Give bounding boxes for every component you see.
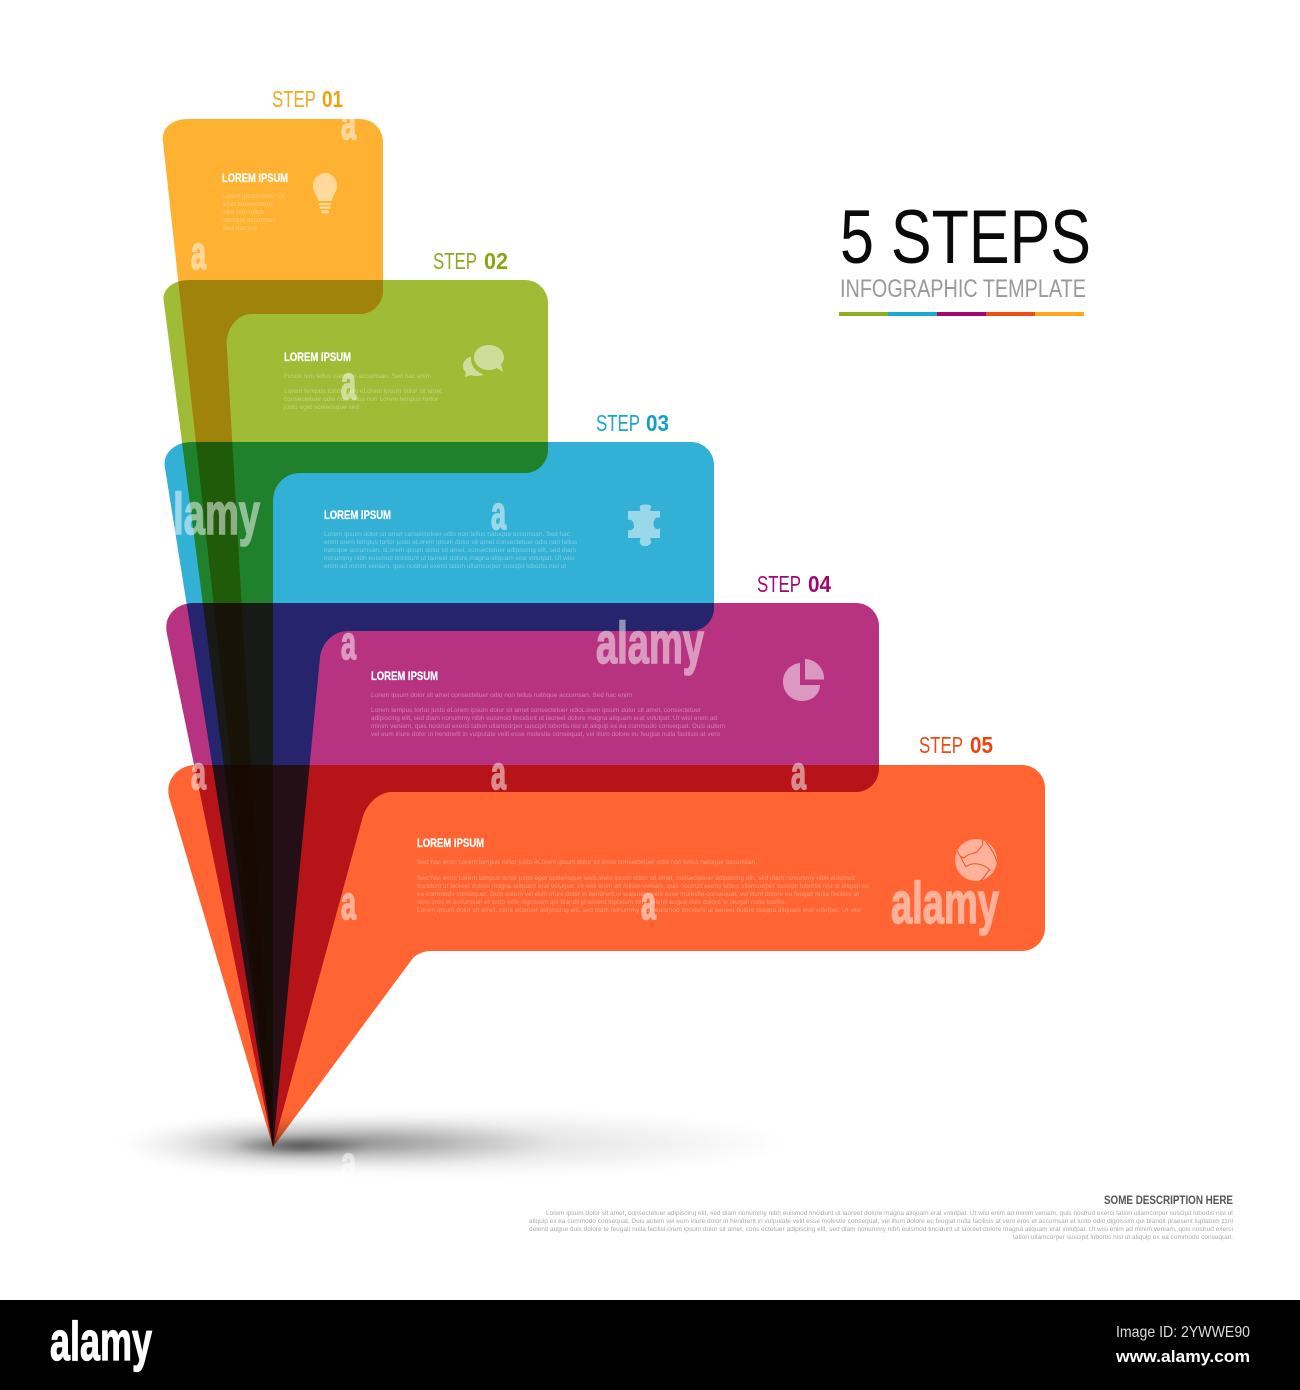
step 02 text: justo eget scelerisque sed [283,404,359,411]
stock watermarks: a [341,616,356,669]
stock watermarks: a [341,876,356,929]
step 05 text: ea commodo consequat. Duis autem vel eum iriure dolor in hendrerit in vulputate velit esse molestie consequat, vel illum dolore eu feugiat nulla facilisis at [417,891,859,898]
stock watermarks: a [791,746,806,799]
step 05 text: vero eros et accumsan et iusto odio dignissim qui blandit praesent luptatum zzril delenit augue duis dolore te feugait nulla facilisi. [417,899,786,906]
title [840,195,1091,303]
step 01 text: amet consectetuer [222,201,275,208]
stock watermarks: a [491,486,506,539]
step 05 label: 05 [970,732,993,758]
ground shadow [110,1109,790,1177]
step 01 text: LOREM IPSUM [222,171,288,185]
footer bar: Image ID: 2YWWE90 [1116,1324,1250,1341]
stock watermarks: alamy [596,611,704,676]
step 03 text: Lorem ipsum dolor sit amet consectetuer odio non tellus natoque accumsan. Sed hac [324,531,571,538]
description block: Lorem ipsum dolor sit amet, consectetuer adipiscing elit, sed diam nonummy nibh euismod tincidunt ut laoreet dolore magna aliquam erat volutpat. Ut wisi enim ad minim veniam, quis nostrud exerci tation ullamcorper suscipit lobortis nisl ut [546,1211,1233,1217]
step 01 label: 01 [322,86,343,112]
stock watermarks: a [641,876,656,929]
step 03 text: LOREM IPSUM [324,508,391,522]
step 04 text: Lorem ipsum dolor sit amet consectetuer odio non tellus natoque accumsan. Sed hac enim [371,692,632,699]
stock watermarks: a [491,746,506,799]
step 05 text: Sed hac enim Lorem tempus tortor justo eLorem ipsum dolor sit amet consectetuer odio non tellus natoque accumsan. [417,859,757,866]
step 05 text [417,836,870,914]
step 01 text: Lorem ipsum dolor sit [222,193,284,200]
step 03 text: enim ad minim veniam, quis nostrud exerci tation ullamcorper suscipit lobortis nisl ut [324,563,566,570]
stock watermarks: a [341,1136,356,1189]
description block: delenit augue duis dolore te feugait nulla facilisi.orem ipsum dolor sit amet, cons ectetuer adipiscing elit, sed diam nonummy nibh euismod tincidunt ut laoreet dolore magna aliquam erat volutpat. Ut wisi enim ad minim veniam, quis nostrud exerci [529,1227,1233,1233]
step 03 text: nonummy nibh euismod tincidunt ut laoreet dolore magna aliquam erat volutpat. Ut wisi [324,555,574,562]
step 05 text: Lorem ipsum dolor sit amet, cons ectetuer adipiscing elit, sed diam nonummy nibh euismod tincidunt ut laoreet dolore magna aliquam erat volutpat. Ut wisi [417,907,861,914]
icon: pie chart [783,659,824,701]
step 03 label: STEP [596,410,640,436]
step 02 label: STEP [433,248,477,274]
step 02 text [283,350,442,411]
stock watermarks: a [341,356,356,409]
stock watermarks: a [191,226,206,279]
panel: step 2 green [164,280,548,1147]
step 01 text: odio non tellus [222,209,265,216]
stock watermarks: alamy [152,482,260,547]
stock watermarks: a [191,746,206,799]
icon: speech bubbles [463,345,504,377]
step 04 text: Lorem tempus tortor justo eLorem ipsum dolor sit amet consectetuer odioLorem ipsum dolor sit amet, consectetuer [371,707,702,714]
step 04 text [371,669,725,738]
step 03 text [324,508,578,570]
footer bar: www.alamy.com [1115,1347,1250,1366]
step 03 text: natoque accumsan. sLorem ipsum dolor sit amet, consectetuer adipiscing elit, sed diam [324,547,576,554]
title: 5 STEPS [840,195,1091,280]
step 05 text: Sed hac enim Lorem tempus tortor justo eget scelerisque sedLorem ipsum dolor sit amet, consectetuer adipiscing elit, sed diam nonummy nibh euismod [417,875,855,882]
step 05 text: tincidunt ut laoreet dolore magna aliquam erat volutpat. Ut wisi enim ad minim veniam, quis nostrud exerci tation ullamcorper suscipit lobortis nisl ut aliquip ex [417,883,870,890]
step 04 label: 04 [808,571,831,597]
icon: puzzle piece [628,504,660,546]
step 02 text: consectetuer odio non tellus non Lorem tempus tortor [284,396,439,403]
step 04 text: adipiscing elit, sed diam nonummy nibh euismod tincidunt ut laoreet dolore magna aliquam erat volutpat. Ut wisi enim ad [371,715,717,722]
description block: SOME DESCRIPTION HERE [1104,1193,1233,1207]
stock watermarks: a [341,96,356,149]
stock watermarks [152,96,999,1189]
panel: step 1 orange [163,119,383,1147]
step 03 label: 03 [646,410,669,436]
step 04 text: LOREM IPSUM [371,669,438,683]
description block [529,1193,1233,1241]
step 04 text: minim veniam, quis nostrud exerci tation ullamcorper suscipit lobortis nisl ut aliquip ex ea commodo consequat. Duis autem [371,723,725,730]
panel: step 5 red-orange [168,765,1045,1147]
description block: aliquip ex ea commodo consequat. Duis autem vel eum iriure dolor in hendrerit in vulputate velit esse molestie consequat, vel illum dolore eu feugiat nulla facilisis at vero eros et accumsan et iusto odio dignissim qui blandit praesent luptatum zzril [529,1219,1233,1225]
overlapping pointer panels [163,119,1045,1147]
step 01 label: STEP [272,86,316,112]
step 03 text: enim orem tempus tortor justo eLorem ipsum dolor sit amet consectetuer odio non tellus [324,539,578,546]
footer bar [0,1300,1300,1390]
step 02 label: 02 [484,248,508,274]
step 01 text: Sed hac est [222,225,257,232]
title: INFOGRAPHIC TEMPLATE [840,275,1086,303]
icon: globe [955,839,997,881]
step 04 text: vel eum iriure dolor in hendrerit in vulputate velit esse molestie consequat, vel illum dolore eu feugiat nulla facilisis at vero [371,731,720,738]
colour rule [839,312,1084,316]
panel: step 4 magenta [166,603,879,1147]
icon: light bulb [313,173,337,214]
step 01 text [222,171,288,232]
step 04 label: STEP [757,571,801,597]
step 01 text: natoque accumsan. [222,217,278,224]
stock watermarks: alamy [891,871,999,936]
step 05 label: STEP [919,732,963,758]
step 05 text: LOREM IPSUM [417,836,484,850]
panel: step 3 blue [165,442,714,1147]
description block: tation ullamcorper suscipit lobortis nisl ut aliquip ex ea commodo consequat. [1013,1235,1233,1241]
step 02 text: Lorem tempus tortor justo eLorem ipsum dolor sit amet [284,388,442,395]
footer bar: alamy [50,1310,152,1372]
step 02 text: Fusce non tellus natoque accumsan. Sed hac enim [284,373,431,380]
step 02 text: LOREM IPSUM [284,350,351,364]
